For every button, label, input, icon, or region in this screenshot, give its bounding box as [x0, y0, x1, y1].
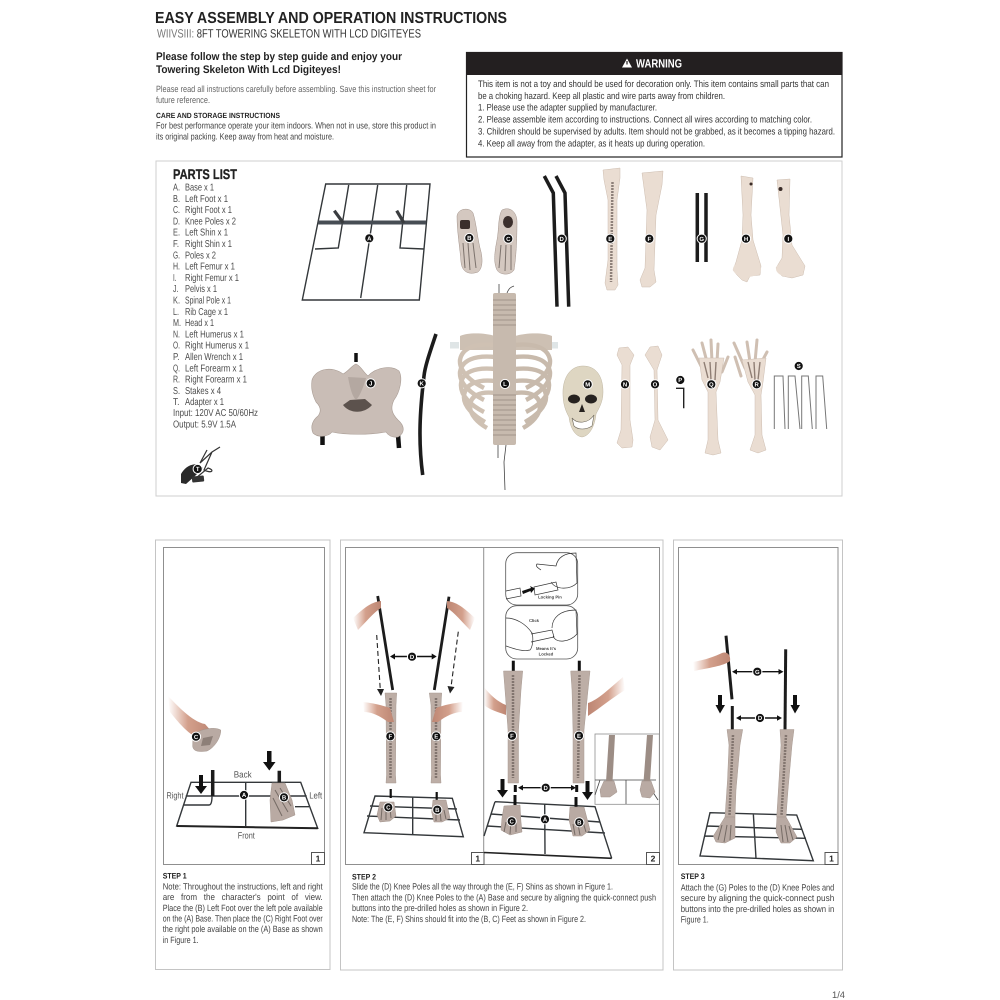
arrow: down to right pole: [195, 775, 207, 794]
inset: click locked: Locked: [539, 652, 554, 656]
parts list items: Output: 5.9V 1.5A: [173, 420, 236, 430]
inset: click locked: Means It's: [536, 646, 557, 651]
D dimension arrow: D: [410, 654, 415, 661]
part J: pelvis: J: [369, 380, 372, 388]
part L: rib cage: [450, 284, 558, 490]
part A: base: A: [367, 236, 372, 242]
figure 1: knee poles through shins: [353, 596, 475, 837]
parts list items: Left Humerus x 1: [185, 329, 244, 340]
direction labels: Right: [166, 790, 184, 800]
warning text: 4. Keep all away from the adapter, as it heats up during operation.: [478, 138, 705, 150]
shin F: F: [510, 733, 514, 740]
inset: locking pin: [506, 553, 578, 605]
step 1 text: Place the (B) Left Foot over the left pole available: [163, 903, 323, 913]
part F: right shin: [640, 171, 663, 287]
figure number: 1: [829, 854, 834, 864]
shin E: E: [434, 734, 438, 740]
part M: head: [563, 366, 603, 437]
part B: left foot: B: [467, 235, 472, 242]
parts list items: Left Forearm x 1: [185, 363, 243, 374]
part H: left femur: H: [744, 236, 748, 243]
parts list items: I.: [173, 273, 176, 284]
part F: right shin: F: [647, 236, 651, 243]
part R: right forearm: [734, 340, 767, 453]
parts list items: Left Foot x 1: [185, 194, 228, 205]
warning text: 2. Please assemble item according to instructions. Connect all wires according to matching color.: [478, 114, 812, 126]
care and storage instructions: [156, 111, 436, 142]
step 1 text: in Figure 1.: [163, 935, 199, 945]
parts list items: Right Humerus x 1: [185, 341, 249, 352]
figure frame: [678, 548, 838, 864]
part S: stakes: S: [797, 363, 801, 370]
part L: rib cage: L: [503, 381, 507, 388]
direction labels: Front: [238, 830, 255, 840]
figure 1 frame: [164, 548, 324, 864]
parts list items: Rib Cage x 1: [185, 307, 228, 318]
parts list items: D.: [173, 216, 180, 227]
G dimension arrow: G: [755, 669, 760, 676]
parts list items: J.: [173, 284, 178, 295]
step 1 base: [177, 770, 318, 828]
direction labels: Left: [309, 790, 323, 800]
panel: step 1: [156, 540, 330, 970]
step 1 text: Note: Throughout the instructions, left and right: [163, 882, 323, 892]
part N: left humerus: N: [623, 382, 627, 388]
D dimension arrow: D: [758, 715, 763, 722]
step 2 text: Note: The (E, F) Shins should fit into the (B, C) Feet as shown in Figure 2.: [352, 914, 586, 924]
left arm: [484, 687, 506, 715]
foot C: C: [510, 818, 515, 826]
dashed arrow left: [377, 635, 384, 696]
parts list items: A.: [173, 182, 180, 194]
care and storage instructions: For best performance operate your item indoors. When not in use, store this product in: [156, 120, 436, 130]
panel: warning: [466, 52, 842, 157]
foot B: [432, 800, 450, 822]
care and storage instructions: its original packing. Keep away from heat and moisture.: [156, 132, 334, 142]
large base: [484, 802, 612, 858]
step 3 text: Figure 1.: [681, 914, 709, 924]
arrow down right: [790, 695, 800, 714]
small base: [364, 796, 463, 837]
direction labels: [166, 770, 323, 840]
part N: left humerus: [617, 347, 634, 448]
parts list items: R.: [173, 375, 180, 386]
part K: spinal pole: [417, 334, 436, 475]
parts list items: Right Forearm x 1: [185, 375, 247, 386]
parts list items: Right Femur x 1: [185, 273, 239, 284]
part B: left foot: [457, 209, 482, 273]
parts list items: Q.: [173, 363, 180, 374]
step 1 text: on the (A) Base. Then place the (C) Right Foot over: [163, 914, 323, 924]
step 2 text: [352, 872, 656, 924]
warning text: 1. Please use the adapter supplied by manufacturer.: [478, 102, 657, 114]
figure 1 number: 1: [475, 854, 480, 864]
panel: step 2: [340, 540, 663, 970]
parts list items: T.: [173, 397, 180, 408]
foot C: [501, 805, 522, 835]
step 3 text: STEP 3: [681, 872, 705, 881]
parts list items: [173, 182, 258, 430]
warning text: 3. Children should be supervised by adults. Item should not be grabbed, as it becomes a tipping hazard.: [478, 126, 835, 138]
step 3 text: Attach the (G) Poles to the (D) Knee Poles and: [681, 882, 834, 892]
right arm: [588, 677, 625, 716]
arrow: down to left pole: [263, 751, 276, 770]
part J: pelvis: [312, 353, 403, 448]
foot C: C: [386, 804, 391, 812]
parts list items: M.: [173, 318, 181, 329]
arrow down left: [716, 695, 725, 714]
direction labels: Back: [234, 770, 252, 780]
D dimension arrow: D: [544, 785, 549, 792]
parts list items: Knee Poles x 2: [185, 216, 236, 227]
part E: left shin: [603, 168, 620, 290]
panel: step 3: [674, 540, 842, 970]
foot B: B: [577, 820, 582, 826]
G pole held: [726, 636, 732, 699]
parts list items: Stakes x 4: [185, 386, 221, 397]
G and D right pole: [784, 649, 787, 731]
shin E: [429, 693, 463, 783]
intro paragraph: [156, 84, 436, 105]
part D: knee poles: D: [560, 236, 565, 243]
foot B: [569, 807, 590, 836]
step 1 text: the right pole available on the (A) Base as shown: [163, 924, 323, 934]
hand: [693, 652, 730, 671]
part T: adapter: [181, 447, 220, 484]
top left arm: [353, 601, 381, 630]
shin E: E: [577, 733, 581, 740]
figure 1 number: [472, 852, 484, 864]
step 1 text: [163, 872, 323, 945]
part C: right foot: [495, 209, 517, 274]
parts list items: Pelvis x 1: [185, 284, 217, 295]
intro heading: Towering Skeleton With Lcd Digiteyes!: [156, 64, 341, 76]
parts list items: Right Foot x 1: [185, 205, 232, 216]
warning text: [478, 79, 835, 150]
left foot on base: [270, 783, 295, 822]
parts list items: Spinal Pole x 1: [185, 296, 231, 306]
hand holding right foot: C: [194, 734, 199, 741]
title: EASY ASSEMBLY AND OPERATION INSTRUCTIONS: [155, 10, 507, 27]
part C: right foot: C: [506, 236, 511, 243]
inset: shins in feet: [595, 734, 659, 804]
part P: allen wrench: [676, 375, 685, 408]
part G: poles: [697, 193, 706, 262]
left leg: [713, 730, 743, 843]
G dimension arrow: [732, 667, 784, 676]
dashed arrow right: [448, 632, 458, 694]
hand holding right foot: [168, 696, 221, 751]
part T: adapter: T: [196, 466, 200, 473]
parts list items: Adapter x 1: [185, 397, 224, 408]
part G: poles: G: [699, 236, 704, 243]
parts list items: N.: [173, 329, 180, 340]
parts list items: L.: [173, 307, 179, 318]
parts list items: Allen Wrench x 1: [185, 352, 243, 363]
step 1 text: are from the character's point of view.: [163, 892, 323, 902]
parts list items: G.: [173, 250, 180, 261]
part H: left femur: [733, 176, 761, 282]
D left pole: [731, 706, 734, 731]
D dimension arrow: [390, 652, 437, 661]
part I: right femur: [776, 179, 805, 278]
step 3 text: buttons into the pre-drilled holes as shown in: [681, 904, 834, 914]
inset: locking pin: Locking Pin: [538, 594, 562, 600]
step 3 text: [681, 872, 834, 924]
figure number 1: [312, 852, 324, 864]
warning text: be a choking hazard. Keep all plastic and wire parts away from children.: [478, 91, 725, 102]
label A: [239, 790, 249, 800]
shin F: F: [388, 734, 392, 740]
warning heading: WARNING: [636, 56, 682, 70]
foot B: B: [435, 807, 440, 814]
part S: stakes: [774, 361, 827, 429]
label A: A: [242, 792, 247, 799]
figure 2: attach shins to base: [484, 661, 625, 858]
intro paragraph: future reference.: [156, 95, 210, 105]
label A: A: [543, 816, 548, 824]
icon: warning triangle: [622, 58, 632, 68]
parts list items: Poles x 2: [185, 250, 216, 261]
parts list items: O.: [173, 341, 180, 352]
part E: left shin: E: [608, 236, 612, 243]
intro text block: [156, 51, 436, 142]
figure 2 number: 2: [651, 854, 656, 864]
foot C: [377, 789, 437, 822]
warning header bar: [466, 52, 842, 75]
label A: [540, 815, 550, 824]
part P: allen wrench: P: [678, 377, 682, 384]
shin F: [363, 693, 397, 783]
parts list items: Base x 1: [185, 182, 214, 194]
inset: click locked: Click: [529, 618, 540, 623]
care and storage instructions: CARE AND STORAGE INSTRUCTIONS: [156, 111, 280, 120]
intro paragraph: Please read all instructions carefully before assembling. Save this instruction sheet for: [156, 84, 436, 94]
panel: parts list: [156, 161, 842, 496]
parts list items: Head x 1: [185, 318, 214, 329]
D dimension arrow: [515, 783, 577, 808]
figure divider: [483, 547, 485, 864]
parts list items: C.: [173, 205, 180, 216]
right leg: [776, 730, 797, 843]
part Q: left forearm: [693, 340, 728, 455]
parts list items: F.: [173, 239, 179, 250]
parts list items: B.: [173, 194, 180, 205]
warning text: This item is not a toy and should be used for decoration only. This item contains small parts that can: [478, 79, 829, 90]
parts list items: S.: [173, 386, 180, 397]
step 2 text: buttons into the pre-drilled holes as shown in Figure 2.: [352, 903, 528, 913]
step 2 text: STEP 2: [352, 872, 376, 882]
parts list items: Left Shin x 1: [185, 228, 228, 239]
figure number 1: 1: [316, 854, 321, 864]
inset: click locked: [506, 606, 578, 659]
part O: right humerus: [645, 346, 668, 450]
parts list heading: PARTS LIST: [173, 166, 237, 182]
part I: right femur: I: [787, 236, 789, 243]
step 2 figure frame: [346, 548, 660, 864]
top right arm: [447, 601, 475, 630]
parts list items: E.: [173, 228, 180, 239]
arrow down right: [582, 781, 593, 800]
step 2 text: Then attach the (D) Knee Poles to the (A) Base and secure by aligning the quick-connect push: [352, 892, 656, 902]
arrow down left: [497, 779, 508, 798]
parts list items: K.: [173, 296, 180, 306]
parts list items: Input: 120V AC 50/60Hz: [173, 408, 258, 419]
step 2 text: Slide the (D) Knee Poles all the way through the (E, F) Shins as shown in Figure 1.: [352, 882, 613, 892]
parts list items: H.: [173, 262, 180, 273]
shin F: [504, 661, 523, 783]
shin E: [571, 661, 590, 783]
D dimension arrow: [736, 713, 782, 723]
subtitle: WIIVSIII: 8FT TOWERING SKELETON WITH LCD DIGITEYES: [157, 26, 421, 40]
part M: head: M: [585, 382, 590, 388]
left foot on base: B: [282, 794, 287, 802]
parts list items: P.: [173, 352, 180, 363]
part O: right humerus: O: [653, 382, 658, 388]
intro heading: [156, 51, 403, 76]
intro heading: Please follow the step by step guide and enjoy your: [156, 51, 403, 63]
figure 2 number: [646, 852, 660, 864]
step 3 text: secure by aligning the quick-connect push: [681, 893, 834, 903]
part K: spinal pole: K: [420, 380, 425, 388]
base: [700, 813, 813, 861]
part D: knee poles: [544, 176, 569, 307]
part R: right forearm: R: [755, 382, 760, 388]
parts list items: Right Shin x 1: [185, 239, 232, 250]
figure number: [825, 852, 838, 864]
part Q: left forearm: Q: [709, 382, 714, 388]
step 1 text: STEP 1: [163, 872, 187, 880]
part A: base: [302, 184, 430, 300]
knee poles held: [378, 596, 449, 690]
parts list items: Left Femur x 1: [185, 262, 235, 273]
